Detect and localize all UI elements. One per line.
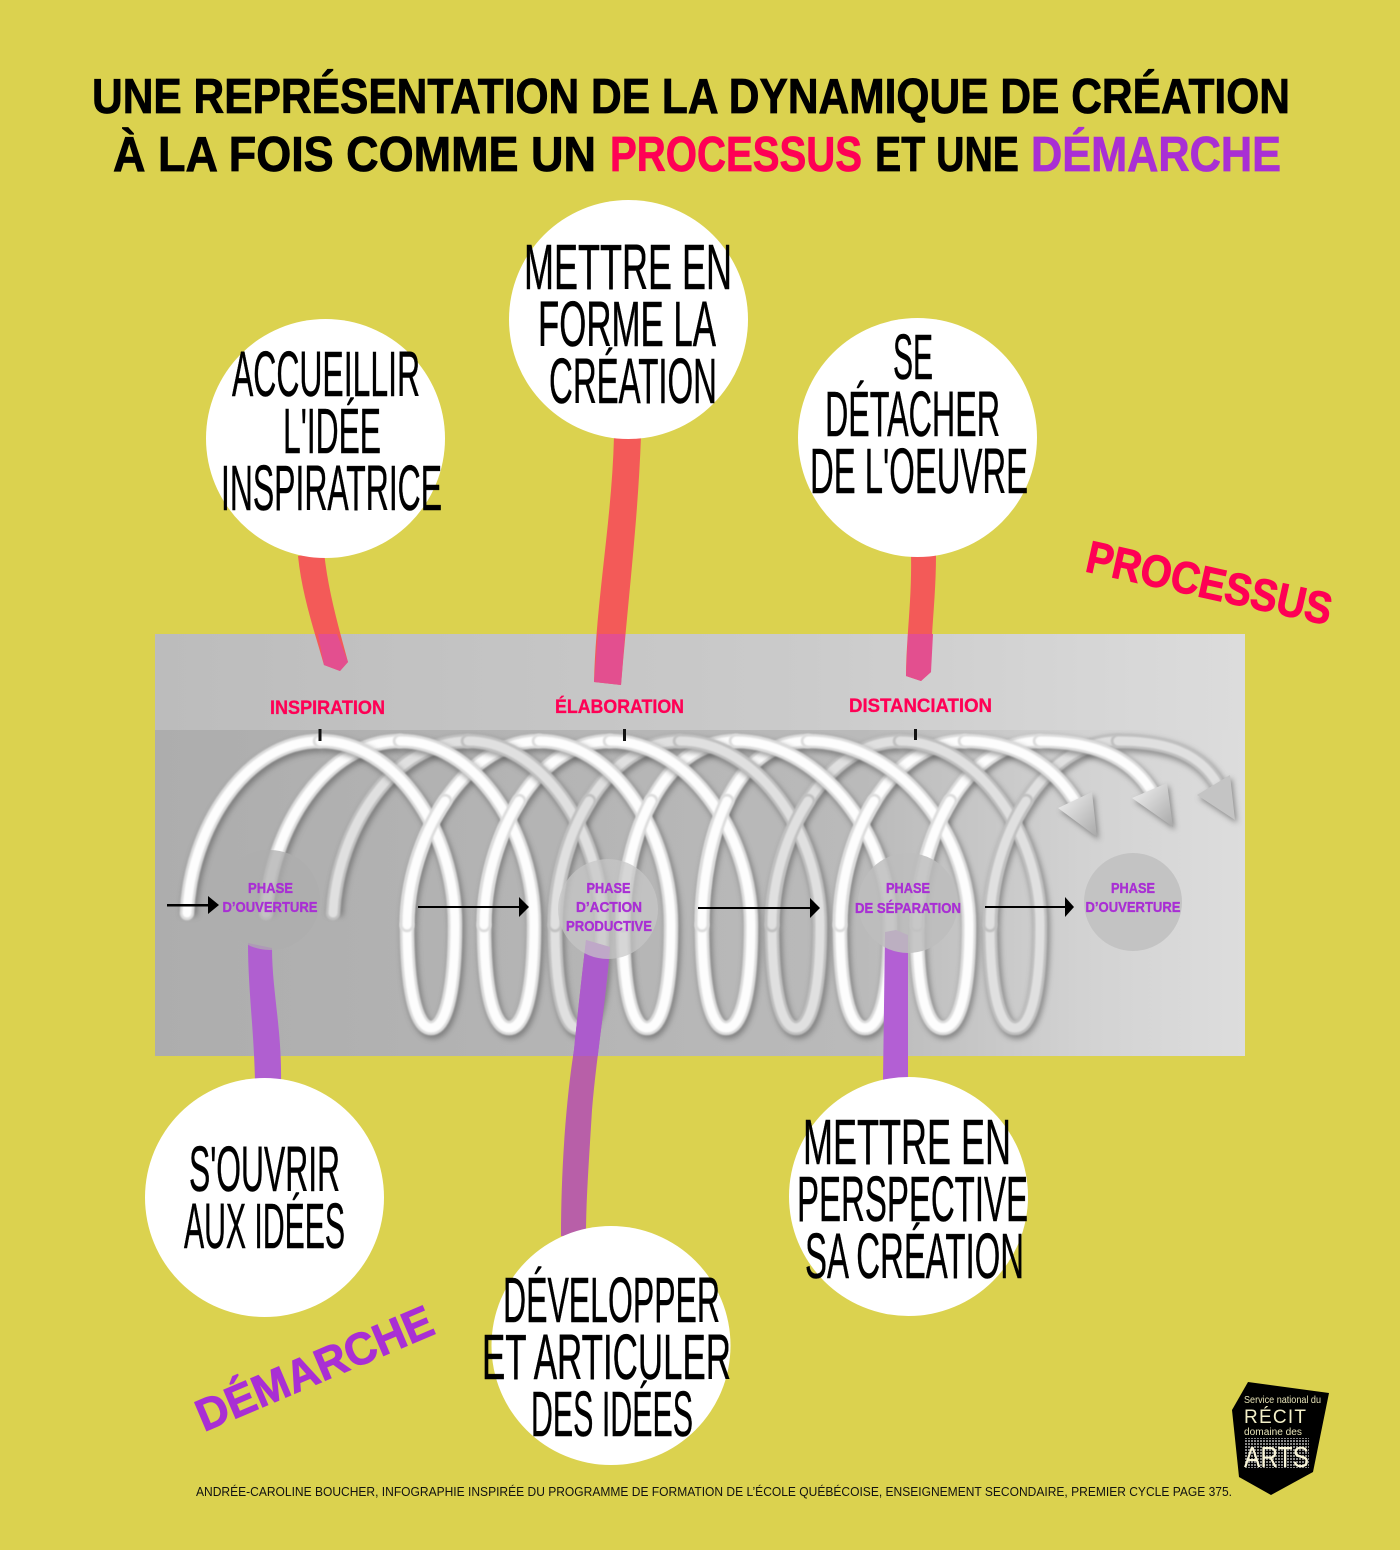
bubble: accueillir l'idée inspiratrice: ACCUEILLIR [232, 338, 420, 410]
logo: récit arts: RÉCIT [1244, 1407, 1306, 1428]
logo: récit arts: Service national du [1244, 1394, 1321, 1406]
connector: action productive [561, 940, 610, 1236]
panel: spiral diagram background [155, 634, 1245, 1056]
title [92, 70, 1290, 182]
stage label: inspiration: INSPIRATION [270, 698, 385, 719]
connector overlays on the panel [318, 634, 933, 685]
bubble: mettre en forme la création: FORME LA [538, 288, 716, 360]
bubble: mettre en perspective sa création [789, 1077, 1028, 1316]
bubble: se détacher de l'oeuvre: DE L'OEUVRE [810, 435, 1028, 507]
ticks on the coil [318, 729, 917, 741]
connector: séparation [883, 930, 908, 1080]
phase label: ouverture 2: D’OUVERTURE [1086, 899, 1180, 916]
bubble: se détacher de l'oeuvre: SE [893, 321, 933, 393]
bubble: mettre en forme la création: CRÉATION [549, 345, 717, 417]
phase label: ouverture: PHASE [248, 880, 293, 897]
bubble: mettre en forme la création: METTRE EN [524, 231, 732, 303]
phase label: ouverture: D’OUVERTURE [222, 899, 318, 916]
title: DÉMARCHE [1031, 128, 1281, 182]
bubble: s'ouvrir aux idées: S'OUVRIR [189, 1133, 340, 1205]
bubble: se détacher de l'oeuvre [798, 318, 1037, 557]
arrowheads of the coil [1058, 775, 1237, 840]
phase label: action productive: PRODUCTIVE [566, 918, 652, 935]
connector: inspiration [298, 552, 348, 671]
arrow 1 [167, 896, 219, 914]
title: PROCESSUS [610, 128, 862, 182]
phase label: séparation: PHASE [886, 880, 930, 897]
logo: récit arts: ARTS [1244, 1442, 1309, 1474]
phase label: ouverture 2 [1086, 880, 1180, 916]
bubble: se détacher de l'oeuvre: DÉTACHER [825, 378, 1000, 450]
spiral coil [187, 741, 1220, 1031]
phase label: séparation: DE SÉPARATION [855, 900, 961, 917]
connector: ouverture [248, 943, 281, 1082]
phase label: action productive: D’ACTION [576, 899, 642, 916]
logo: récit arts: domaine des [1244, 1427, 1302, 1438]
phase discs [220, 850, 1182, 959]
bubble: mettre en perspective sa création: SA CRÉATION [805, 1220, 1024, 1292]
axis label: processus: PROCESSUS [1082, 531, 1337, 635]
phase label: ouverture [222, 880, 318, 916]
connector: élaboration [594, 436, 641, 685]
bubble: mettre en perspective sa création: PERSPECTIVE [797, 1163, 1028, 1235]
phase label: ouverture 2: PHASE [1111, 880, 1155, 897]
bubble: s'ouvrir aux idées [145, 1078, 384, 1317]
logo: récit arts [1232, 1382, 1329, 1495]
bubble: développer et articuler des idées: ET ARTICULER [482, 1321, 731, 1393]
arrow 2 [418, 897, 529, 917]
stage label: distanciation: DISTANCIATION [849, 696, 992, 717]
bubble: mettre en perspective sa création: METTRE EN [803, 1106, 1011, 1178]
axis label: démarche: DÉMARCHE [188, 1295, 441, 1441]
bubble: accueillir l'idée inspiratrice [206, 319, 445, 558]
bubble: s'ouvrir aux idées: AUX IDÉES [184, 1190, 345, 1262]
arrow 4 [985, 897, 1074, 917]
bubble: mettre en forme la création [509, 200, 748, 439]
bubble: développer et articuler des idées [482, 1226, 731, 1465]
arrow 3 [698, 898, 820, 918]
phase label: action productive [566, 880, 652, 935]
credit line: ANDRÉE-CAROLINE BOUCHER, INFOGRAPHIE INSPIRÉE DU PROGRAMME DE FORMATION DE L’ÉCOLE QUÉBÉCOISE, ENSEIGNEMENT SECONDAIRE, PREMIER CYCLE PAGE 375. [196, 1484, 1232, 1499]
phase label: action productive: PHASE [586, 880, 630, 897]
bubble: développer et articuler des idées: DÉVELOPPER [503, 1264, 720, 1336]
bubble: développer et articuler des idées: DES IDÉES [531, 1378, 693, 1450]
stage label: élaboration: ÉLABORATION [555, 696, 684, 718]
connector: distanciation [906, 555, 936, 681]
bubble: accueillir l'idée inspiratrice: INSPIRATRICE [221, 452, 442, 524]
bubble: accueillir l'idée inspiratrice: L'IDÉE [283, 395, 381, 467]
title: À LA FOIS COMME UN [113, 128, 596, 182]
phase label: séparation [855, 880, 961, 917]
title: ET UNE [875, 128, 1019, 182]
